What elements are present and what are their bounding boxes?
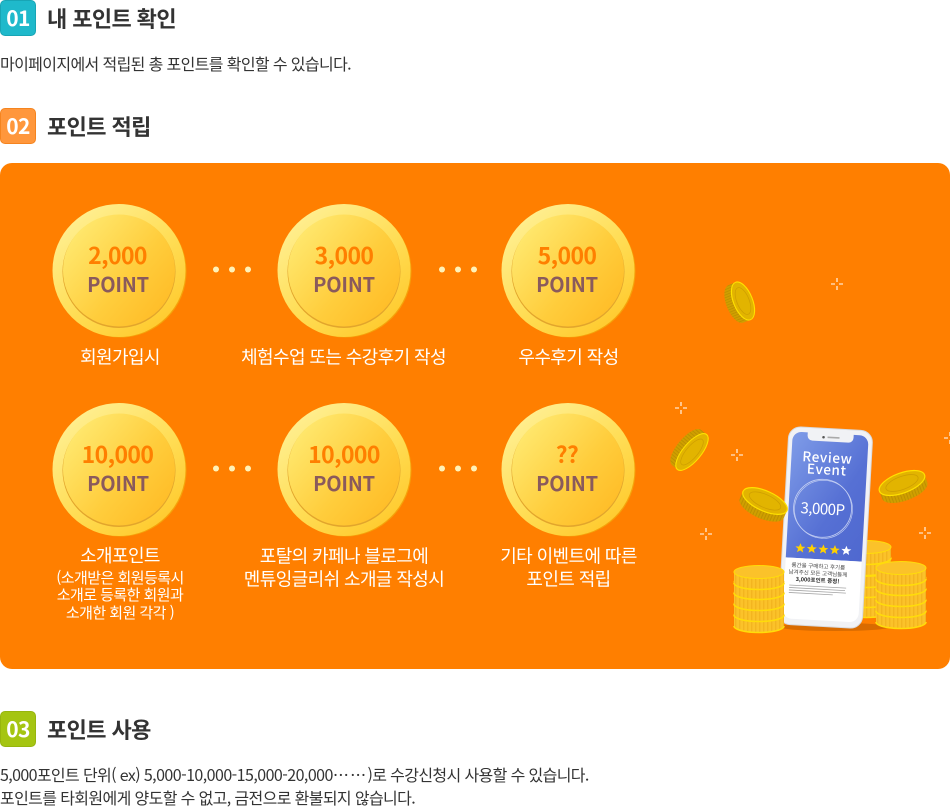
phone: Review (802, 445, 853, 468)
label: referral: 소개한 회원 각각 ) (66, 602, 174, 623)
phone (778, 426, 873, 629)
label: referral: 소개포인트 (80, 542, 160, 568)
section 02 badge: 02 (6, 111, 30, 141)
phone: 3,000P (800, 497, 845, 521)
label: portal blog: 멘튜잉글리쉬 소개글 작성시 (244, 566, 444, 592)
coin: 2,000 point (52, 204, 186, 338)
label: portal blog (244, 542, 444, 592)
coin: 10,000 point second: 10,000 (308, 436, 380, 470)
label: sign up: 회원가입시 (80, 344, 160, 370)
section 03 heading: 포인트 사용 (47, 713, 151, 745)
right coin stack (876, 562, 926, 628)
coin: 10,000 point: 10,000 (82, 436, 153, 470)
dots (213, 466, 251, 472)
coin: 2,000 point: 2,000 (88, 237, 147, 271)
section 03 badge: 03 (6, 714, 30, 744)
section 03 text: 포인트를 타회원에게 양도할 수 없고, 금전으로 환불되지 않습니다. (0, 784, 415, 808)
label: best review: 우수후기 작성 (518, 344, 619, 370)
dots (439, 466, 477, 472)
panel: point earning (0, 163, 950, 669)
coin: ?? point: POINT (536, 468, 598, 497)
coin: 10,000 point (52, 403, 186, 536)
coin: 10,000 point second (278, 403, 412, 536)
section 01 text: 마이페이지에서 적립된 총 포인트를 확인할 수 있습니다. (0, 51, 351, 75)
coin: 10,000 point second: POINT (313, 468, 375, 497)
coin: ?? point (502, 403, 636, 536)
coin: 2,000 point: POINT (87, 269, 149, 298)
label: other events (500, 542, 637, 592)
sparkles (675, 278, 950, 540)
phone: 남겨주신 모든 고객님들께 (788, 568, 847, 579)
phone shadow (780, 623, 890, 631)
phone: 룸간을 구매하고 후기를 (791, 561, 845, 572)
label: other events: 기타 이벤트에 따른 (500, 542, 637, 568)
flying coin right (876, 465, 931, 508)
coin: 5,000 point (502, 204, 636, 338)
section 02 badge (0, 108, 36, 144)
phone: Event (806, 457, 847, 480)
flying coin left (665, 424, 714, 475)
flying coin middle (736, 482, 791, 527)
section 02 heading: 포인트 적립 (47, 110, 151, 142)
coin: 3,000 point: POINT (313, 269, 375, 298)
back coin stack (841, 540, 891, 618)
section 03 text (0, 762, 589, 808)
dots (213, 266, 251, 272)
flying coin top (720, 279, 759, 326)
section 03 text: 5,000포인트 단위( ex) 5,000-10,000-15,000-20,000……)로 수강신청시 사용할 수 있습니다. (0, 762, 589, 786)
section 01 heading: 내 포인트 확인 (47, 2, 176, 34)
illustration: phone and coins (665, 278, 950, 632)
label: referral: 소개로 등록한 회원과 (57, 584, 184, 605)
label: other events: 포인트 적립 (526, 566, 611, 592)
section 01 badge: 01 (6, 3, 30, 33)
coin: 3,000 point (278, 204, 412, 338)
coin: 5,000 point: POINT (536, 269, 598, 298)
label: referral (56, 542, 184, 623)
coin: 3,000 point: 3,000 (315, 237, 373, 271)
coin: ?? point: ?? (556, 436, 578, 470)
coin: 10,000 point: POINT (87, 468, 149, 497)
left coin stack (734, 566, 784, 632)
phone: 3,000포인트 증정! (796, 575, 840, 585)
label: review: 체험수업 또는 수강후기 작성 (241, 344, 446, 370)
label: portal blog: 포탈의 카페나 블로그에 (260, 542, 428, 568)
section 01 badge (0, 0, 36, 36)
section 03 badge (0, 711, 36, 747)
label: referral: (소개받은 회원등록시 (56, 567, 184, 588)
coin: 5,000 point: 5,000 (538, 237, 596, 271)
panel background (0, 163, 950, 669)
dots (439, 266, 477, 272)
